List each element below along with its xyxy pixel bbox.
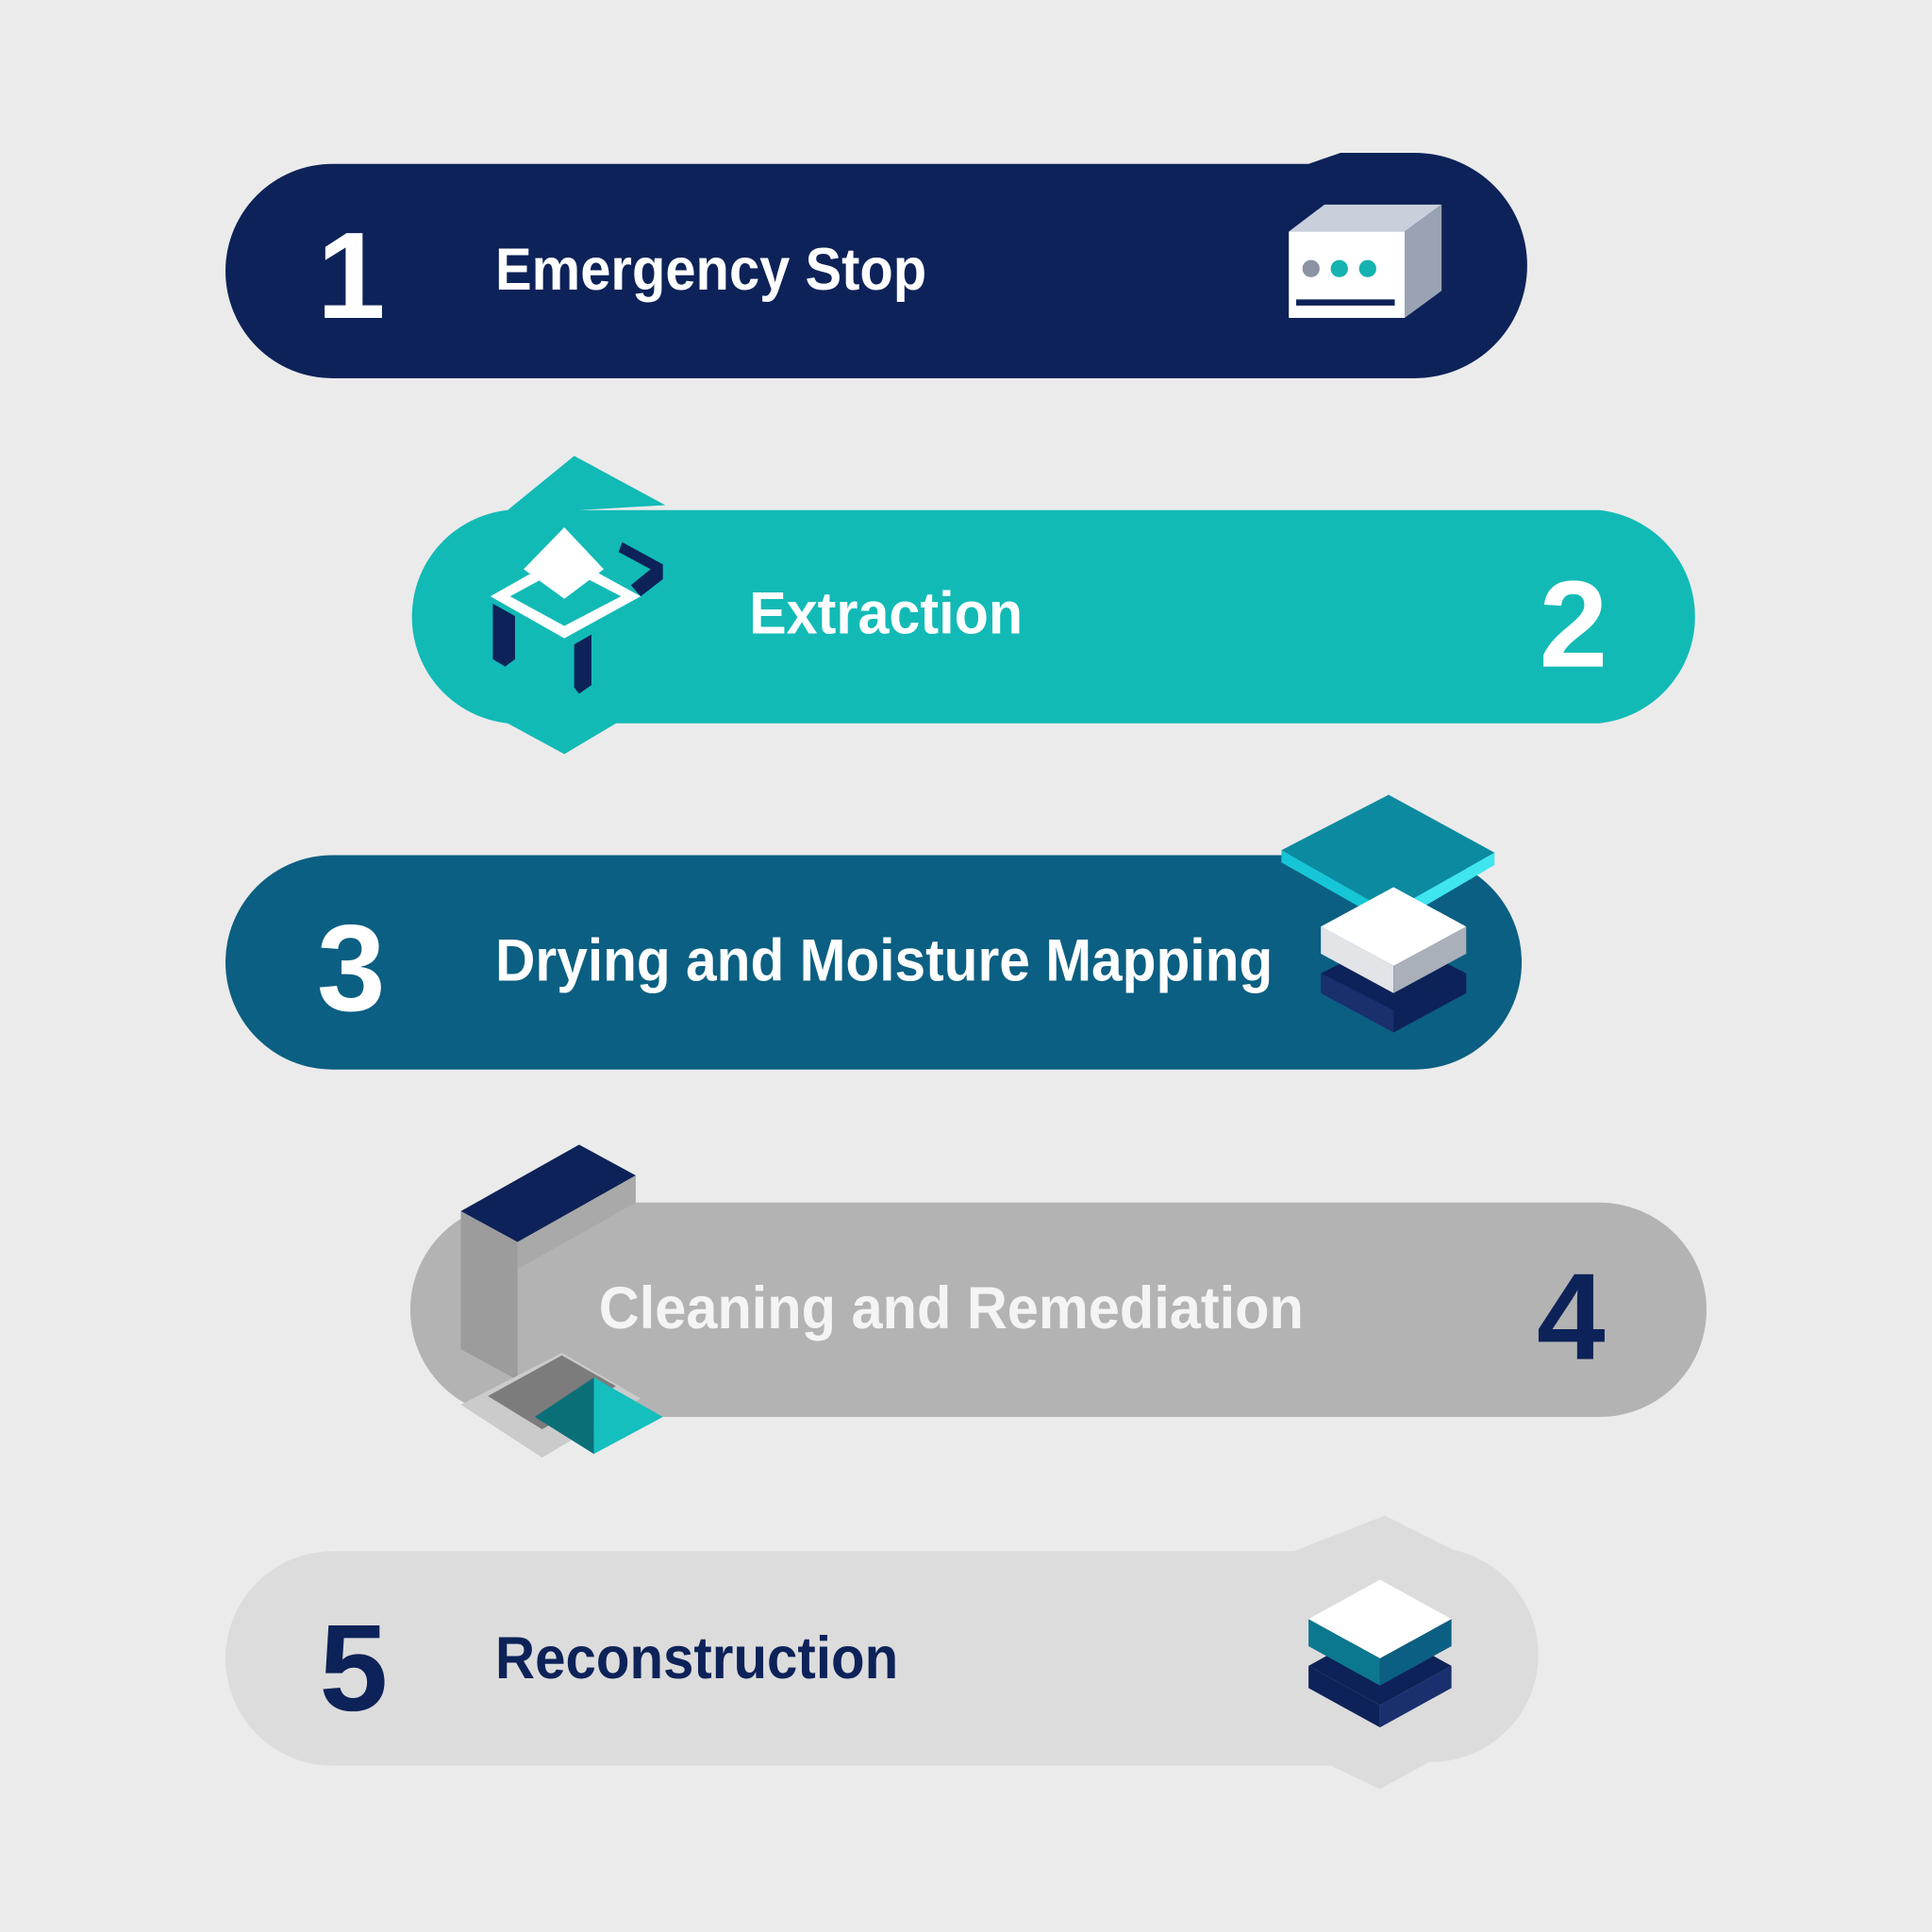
heading: Reconstruction: Reconstruction xyxy=(495,1625,898,1691)
icon: extraction table xyxy=(491,527,663,693)
icon: control box xyxy=(1289,205,1441,318)
step 3 bar xyxy=(225,794,1522,1070)
heading: Drying and Moisture Mapping: Drying and Moisture Mapping xyxy=(495,928,1273,994)
heading: Extraction: Extraction xyxy=(749,580,1023,646)
number 1: 1 xyxy=(317,207,386,344)
number 2: 2 xyxy=(1540,556,1607,693)
icon: blocks xyxy=(460,1144,663,1457)
heading: Cleaning and Remediation: Cleaning and Remediation xyxy=(599,1275,1304,1341)
number 5: 5 xyxy=(320,1599,388,1737)
number 3: 3 xyxy=(317,899,386,1037)
heading: Emergency Stop: Emergency Stop xyxy=(495,237,926,303)
step 5 bar xyxy=(225,1516,1539,1789)
step 2 bar xyxy=(412,456,1695,754)
step 4 bar xyxy=(410,1144,1707,1457)
icon: stacked boxes xyxy=(1308,1579,1452,1727)
step 1 bar xyxy=(225,153,1527,378)
number 4: 4 xyxy=(1537,1248,1606,1386)
icon: stacked layers xyxy=(1281,794,1494,1033)
